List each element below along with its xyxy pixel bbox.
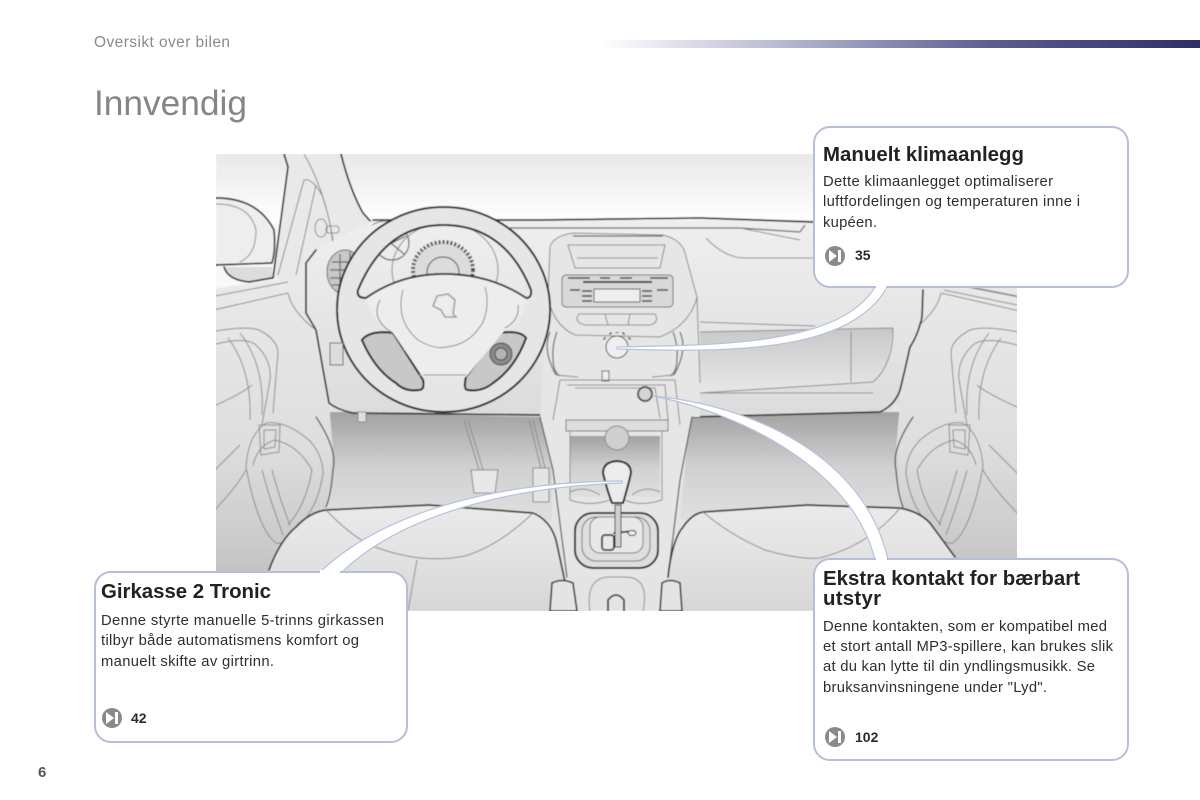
- callout: Ekstra kontakt: Denne kontakten, som er kompatibel med: [823, 619, 1107, 635]
- icon: page reference: [102, 708, 122, 728]
- callout: Girkasse 2 Tronic: [95, 570, 407, 742]
- callout: Manuelt klimaanlegg: luftfordelingen og temperaturen inne i: [823, 194, 1080, 210]
- leader: gearbox: [319, 481, 622, 573]
- cup holder and handbrake: [589, 577, 645, 611]
- callout: Girkasse 2 Tronic: Denne styrte manuelle 5-trinns girkassen: [101, 613, 384, 629]
- door right: [894, 288, 1017, 558]
- storage and console: [540, 380, 692, 577]
- callout: Manuelt klimaanlegg: Dette klimaanlegget optimaliserer: [823, 174, 1053, 190]
- glovebox: [700, 328, 893, 393]
- callout: Ekstra kontakt: [814, 557, 1128, 760]
- callout: Manuelt klimaanlegg: 35: [855, 247, 871, 263]
- seat right: [660, 505, 970, 611]
- callout: Ekstra kontakt: Ekstra kontakt for bærbart: [823, 568, 1080, 590]
- page section label: Oversikt over bilen: [94, 34, 230, 51]
- callout: Manuelt klimaanlegg: [814, 127, 1128, 289]
- car interior illustration: [205, 154, 1024, 611]
- callout: Ekstra kontakt: et stort antall MP3-spillere, kan brukes slik: [823, 639, 1114, 655]
- pedals: [358, 412, 549, 502]
- side air vent: [326, 249, 354, 293]
- switch: [330, 343, 343, 365]
- callout: Girkasse 2 Tronic: Girkasse 2 Tronic: [101, 581, 271, 603]
- footwell right: [682, 411, 901, 508]
- climate knob: [606, 336, 628, 358]
- leader: aux socket: [653, 396, 888, 560]
- callout: Ekstra kontakt: 102: [855, 729, 879, 745]
- seat left: [269, 505, 570, 611]
- steering wheel: [330, 207, 550, 412]
- lion logo: [433, 294, 456, 317]
- callout: Girkasse 2 Tronic: manuelt skifte av girtrinn.: [101, 654, 274, 670]
- wheel hub: [366, 274, 526, 377]
- page number: 6: [38, 764, 46, 781]
- callout: Manuelt klimaanlegg: Manuelt klimaanlegg: [823, 144, 1024, 166]
- callout: Manuelt klimaanlegg: kupéen.: [823, 215, 877, 231]
- callout: Girkasse 2 Tronic: tilbyr både automatismens komfort og: [101, 633, 359, 649]
- callout: Ekstra kontakt: bruksanvinsningene under "Lyd".: [823, 680, 1047, 696]
- aux socket: [638, 387, 652, 401]
- footwell left: [328, 411, 552, 508]
- icon: page reference: [825, 246, 845, 266]
- center stack with radio: [539, 232, 701, 462]
- header gradient bar: [600, 40, 1200, 48]
- callout: Ekstra kontakt: utstyr: [823, 588, 881, 610]
- title: Innvendig: [94, 84, 247, 123]
- ignition: [490, 343, 512, 365]
- leader: climate: [617, 287, 887, 350]
- dashboard: [306, 218, 1017, 417]
- callout: Ekstra kontakt: at du kan lytte til din yndlingsmusikk. Se: [823, 659, 1095, 675]
- windshield: [216, 166, 813, 224]
- callout: Girkasse 2 Tronic: 42: [131, 710, 147, 726]
- A pillar left: [273, 154, 373, 280]
- icon: page reference: [825, 727, 845, 747]
- door left: [216, 265, 336, 571]
- door mirror left: [216, 198, 275, 282]
- instrument cluster: [372, 220, 499, 283]
- gear lever and gate: [550, 461, 682, 611]
